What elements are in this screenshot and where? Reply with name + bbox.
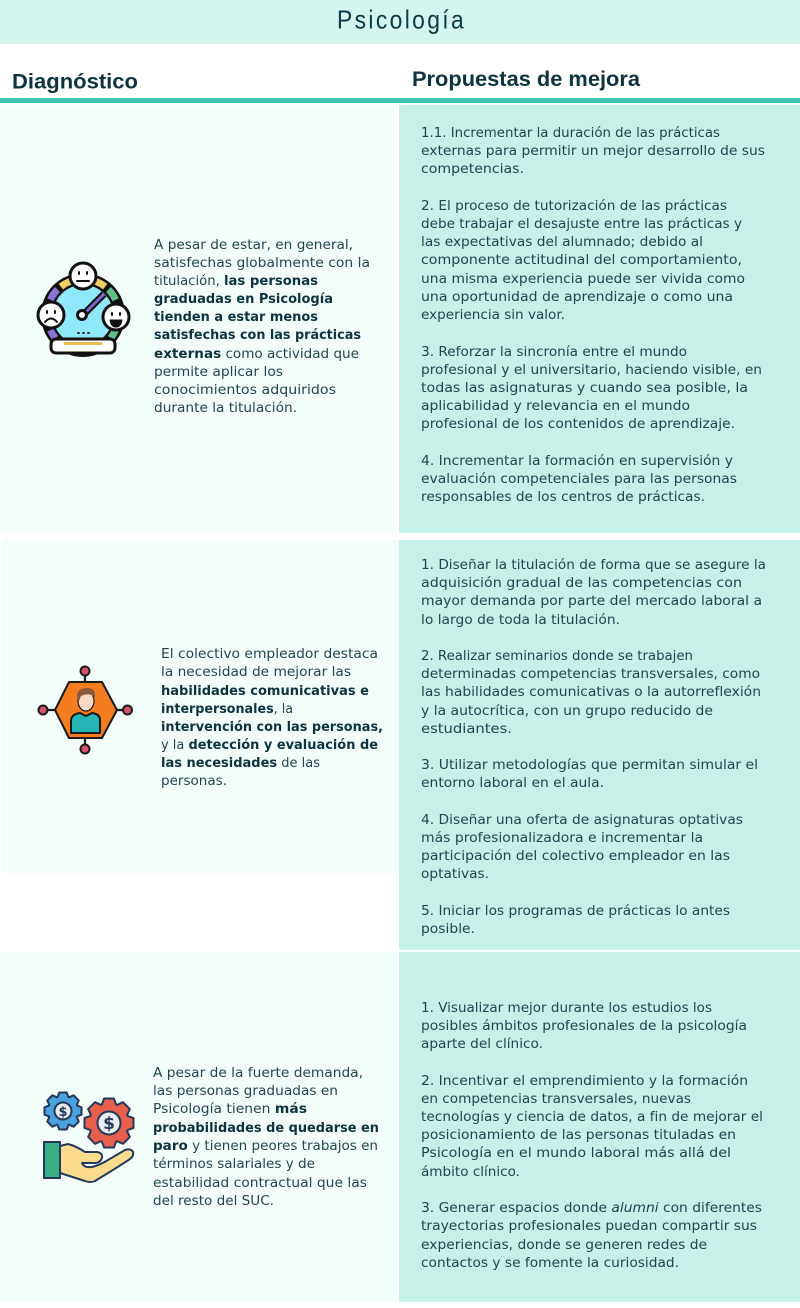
panel: proposals 3: ámbito clínico.: [421, 1165, 520, 1180]
panel: proposals 2: 2. Realizar seminarios donde se trabajen: [421, 649, 693, 664]
panel: proposals 3: tecnologías y ciencia de datos, a fin de mejorar el: [421, 1110, 763, 1125]
text: diagnosis 1: titulación, las personas: [154, 274, 318, 289]
panel: proposals 1: competencias.: [421, 162, 524, 177]
panel: proposals 2: y la autocrítica, con un grupo reducido de: [421, 704, 713, 719]
panel: proposals 3: [399, 952, 800, 1302]
panel: diagnosis 3: [0, 952, 398, 1302]
text: diagnosis 3: paro y tienen peores trabajos en: [153, 1139, 378, 1154]
panel: proposals 1: todas las asignaturas y cuando sea posible, la: [421, 381, 748, 396]
text: diagnosis 2: habilidades comunicativas e: [161, 684, 369, 699]
text: diagnosis 2: intervención con las personas,: [161, 720, 383, 735]
panel: proposals 1: profesional de los contenidos de aprendizaje.: [421, 417, 735, 432]
panel: proposals 1: 2. El proceso de tutorización de las prácticas: [421, 199, 727, 214]
panel: proposals 2: 1. Diseñar la titulación de forma que se asegure la: [421, 558, 766, 573]
icon: satisfaction gauge: [38, 263, 129, 353]
heading: Propuestas de mejora: Propuestas de mejora: [412, 68, 640, 91]
panel: proposals 3: Psicología en el mundo laboral más allá del: [421, 1146, 731, 1161]
panel: proposals 2: optativas.: [421, 867, 489, 882]
panel: proposals 1: debe trabajar el desajuste entre las prácticas y: [421, 217, 742, 232]
panel: proposals 1: componente actitudinal del comportamiento,: [421, 253, 742, 268]
text: diagnosis 3: estabilidad contractual que las: [153, 1176, 367, 1191]
panel: proposals 2: mayor demanda por parte del mercado laboral a: [421, 594, 762, 609]
panel: proposals 2: más profesionalizadora e incrementar la: [421, 831, 703, 846]
icon part: red gear: $: [103, 1114, 115, 1134]
panel: proposals 3: posicionamiento de las personas tituladas en: [421, 1128, 736, 1143]
text: diagnosis 2: El colectivo empleador destaca: [161, 647, 378, 662]
panel: proposals 2: 4. Diseñar una oferta de asignaturas optativas: [421, 813, 743, 828]
header rule: [0, 98, 800, 103]
text: diagnosis 1: externas como actividad que: [154, 347, 359, 362]
panel: proposals 3: posibles ámbitos profesionales de la psicología: [421, 1019, 747, 1034]
text: diagnosis 1: graduadas en Psicología: [154, 292, 333, 307]
icon: person in hexagon network: [38, 666, 132, 754]
title band: Psicología: [337, 6, 464, 35]
text: diagnosis 2: personas.: [161, 774, 227, 789]
text: diagnosis 1: satisfechas globalmente con la: [154, 256, 370, 271]
text: diagnosis 1: permite aplicar los: [154, 365, 283, 380]
panel: proposals 3: aparte del clínico.: [421, 1037, 543, 1052]
text: diagnosis 2: interpersonales, la: [161, 702, 293, 717]
text: diagnosis 2: la necesidad de mejorar las: [161, 665, 351, 680]
text: diagnosis 3: [153, 1066, 379, 1209]
panel: proposals 2: estudiantes.: [421, 722, 512, 737]
panel: diagnosis 2: [2, 540, 399, 873]
panel: proposals 1: 3. Reforzar la sincronía entre el mundo: [421, 345, 687, 360]
panel: proposals 3: en competencias transversales, nuevas: [421, 1092, 691, 1107]
panel: proposals 3: contactos y se fomente la curiosidad.: [421, 1256, 679, 1271]
panel: proposals 2: entorno laboral en el aula.: [421, 776, 604, 791]
text: diagnosis 1: satisfechas con las prácticas: [154, 328, 361, 343]
title band: [0, 0, 800, 44]
icon part: hand: [60, 1144, 133, 1182]
panel: proposals 2: posible.: [421, 922, 475, 937]
icon part: blue gear: $: [58, 1105, 68, 1120]
text: diagnosis 1: tienden a estar menos: [154, 310, 318, 325]
panel: proposals 2: [399, 540, 800, 950]
panel: proposals 1: 1.1. Incrementar la duración de las prácticas: [421, 126, 720, 141]
text: diagnosis 3: las personas graduadas en: [153, 1084, 338, 1099]
panel: proposals 2: participación del colectivo empleador en las: [421, 849, 730, 864]
panel: proposals 1: evaluación competenciales para las personas: [421, 472, 737, 487]
text: diagnosis 3: términos salariales y de: [153, 1157, 315, 1172]
panel: proposals 1: una oportunidad de aprendizaje o como una: [421, 290, 733, 305]
panel: proposals 2: determinadas competencias transversales, como: [421, 667, 760, 682]
text: diagnosis 3: Psicología tienen más: [153, 1102, 307, 1117]
panel: proposals 1: una misma experiencia puede ser vivida como: [421, 272, 745, 287]
text: diagnosis 1: [154, 238, 370, 416]
text: diagnosis 2: las necesidades de las: [161, 756, 320, 771]
panel: proposals 3: 1. Visualizar mejor durante los estudios los: [421, 1001, 712, 1016]
panel: proposals 1: experiencia sin valor.: [421, 308, 565, 323]
panel: proposals 1: externas para permitir un mejor desarrollo de sus: [421, 144, 765, 159]
text: diagnosis 3: A pesar de la fuerte demanda,: [153, 1066, 363, 1081]
panel: proposals 1: [399, 105, 800, 533]
text: diagnosis 3: del resto del SUC.: [153, 1194, 274, 1209]
text: diagnosis 1: A pesar de estar, en general,: [154, 238, 353, 253]
panel: proposals 3: 3. Generar espacios donde alumni con diferentes: [421, 1201, 762, 1216]
text: diagnosis 1: conocimientos adquiridos: [154, 383, 336, 398]
text: diagnosis 1: durante la titulación.: [154, 401, 297, 416]
text: diagnosis 2: [161, 647, 383, 789]
text: diagnosis 2: y la detección y evaluación de: [161, 738, 378, 753]
icon part: cuff: [44, 1142, 60, 1178]
panel: proposals 2: adquisición gradual de las competencias con: [421, 576, 742, 591]
panel: proposals 3: 2. Incentivar el emprendimiento y la formación: [421, 1074, 748, 1089]
heading: Diagnóstico: Diagnóstico: [12, 70, 138, 94]
panel: proposals 2: 5. Iniciar los programas de prácticas lo antes: [421, 904, 730, 919]
panel: proposals 1: profesional y el universitario, haciendo visible, en: [421, 363, 762, 378]
panel: proposals 2: las habilidades comunicativas o la autorreflexión: [421, 685, 761, 700]
panel: diagnosis 1: [0, 105, 394, 533]
panel: proposals 2: 3. Utilizar metodologías que permitan simular el: [421, 758, 758, 773]
panel: proposals 2: lo largo de toda la titulación.: [421, 613, 620, 628]
panel: proposals 1: responsables de los centros de prácticas.: [421, 490, 705, 505]
panel: proposals 1: 4. Incrementar la formación en supervisión y: [421, 454, 733, 469]
icon: hand with money gears: [44, 1092, 134, 1182]
panel: proposals 3: experiencias, donde se generen redes de: [421, 1238, 707, 1253]
panel: proposals 1: aplicabilidad y relevancia en el mundo: [421, 399, 690, 414]
text: diagnosis 3: probabilidades de quedarse en: [153, 1121, 379, 1136]
panel: proposals 1: las expectativas del alumnado; debido al: [421, 235, 703, 250]
panel: proposals 3: trayectorias profesionales puedan compartir sus: [421, 1219, 757, 1234]
